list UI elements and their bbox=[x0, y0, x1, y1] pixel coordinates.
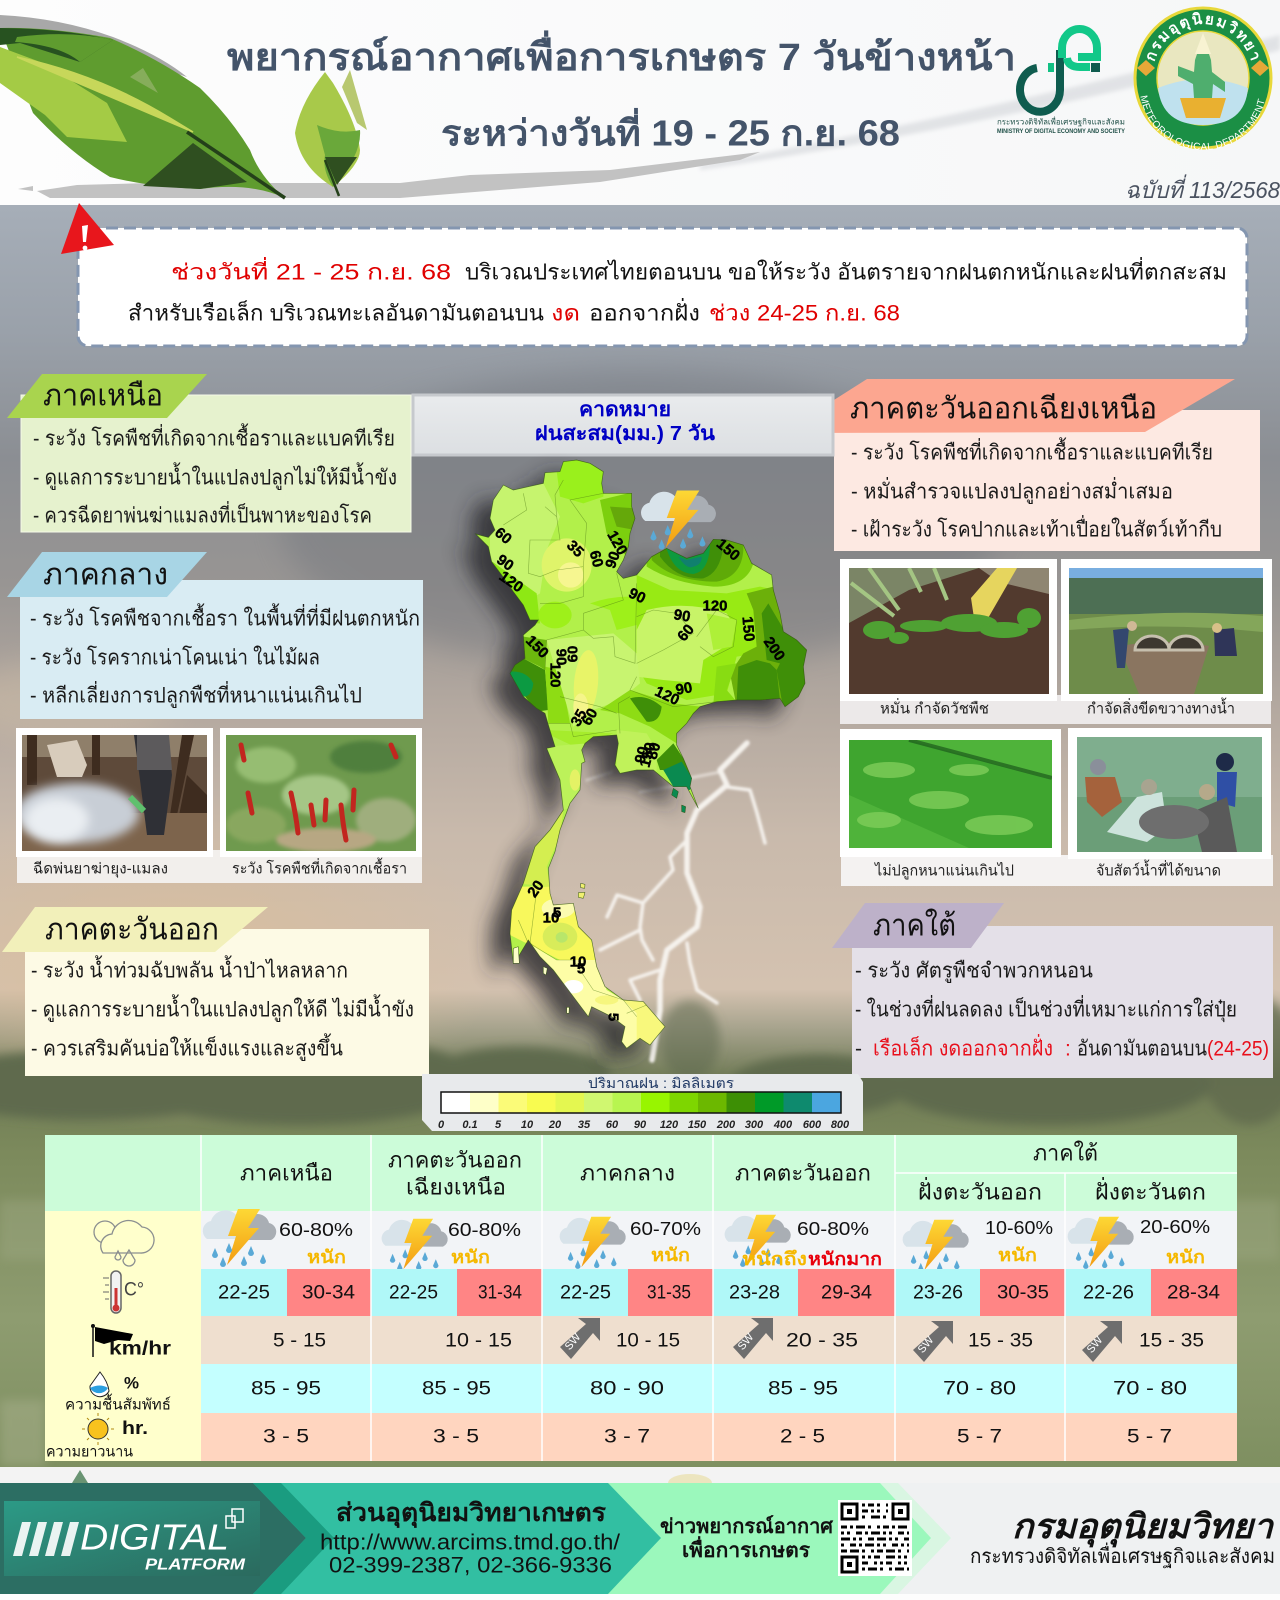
rain amount contour labels: 60 bbox=[491, 524, 515, 548]
forecast table bbox=[45, 1135, 1237, 1461]
rainfall map of Thailand bbox=[456, 450, 830, 1083]
icon: weather outline bbox=[94, 1221, 154, 1266]
rain amount contour labels: 60 bbox=[578, 706, 602, 728]
rainfall colour legend: 600 bbox=[803, 1119, 822, 1131]
rainfall colour legend: 300 bbox=[745, 1119, 764, 1131]
province lines bbox=[503, 480, 737, 1017]
rain amount contour labels: 90 bbox=[632, 745, 652, 765]
rain amount contour labels: 5 bbox=[604, 1013, 622, 1021]
photo grid: right four with captions: จับสัตว์น้ำที่ได้ขนาด bbox=[1096, 860, 1221, 880]
panel: eastern region: - ดูแลการระบายน้ำในแปลงปลูกให้ดี ไม่มีน้ำขัง bbox=[31, 994, 414, 1022]
icon: thermometer with celsius: C° bbox=[124, 1280, 144, 1300]
rain amount contour labels: 90 bbox=[672, 606, 692, 626]
panel: central region: - ระวัง โรครากเน่าโคนเน่า ในไม้ผล bbox=[30, 646, 320, 670]
department name: กรมอุตุนิยมวิทยา bbox=[1012, 1508, 1275, 1548]
title: พยากรณ์อากาศเพื่อการเกษตร 7 วันข้างหน้า bbox=[227, 30, 1016, 79]
photo grid: right four with captions: กำจัดสิ่งขีดขวางทางน้ำ bbox=[1087, 698, 1235, 718]
logo: meteorological department seal bbox=[1134, 6, 1272, 150]
rain amount contour labels: 80 bbox=[644, 741, 664, 761]
photo: clearing a culvert bbox=[1061, 559, 1272, 701]
rain amount contour labels: 5 bbox=[577, 960, 585, 978]
photo grid: right four with captions bbox=[840, 559, 1273, 886]
row: temperature: 28-34 bbox=[1167, 1282, 1220, 1304]
row: temperature: 29-34 bbox=[821, 1282, 872, 1304]
table header row: ภาคเหนือ bbox=[240, 1160, 333, 1186]
icon: wind sock with unit bbox=[91, 1324, 172, 1360]
panel: central region: ภาคกลาง bbox=[43, 558, 168, 592]
rainfall colour legend: 200 bbox=[716, 1119, 736, 1131]
subtitle date range: ระหว่างวันที่ 19 - 25 ก.ย. 68 bbox=[441, 108, 900, 154]
rainfall colour legend bbox=[422, 1074, 863, 1131]
row: rain chance: หนัก bbox=[307, 1247, 346, 1267]
rainfall colour legend: 20 bbox=[548, 1119, 562, 1131]
alert callout: งด bbox=[551, 300, 580, 326]
panel: eastern region: ภาคตะวันออก bbox=[45, 914, 219, 946]
icon: humidity drop with label bbox=[65, 1372, 171, 1414]
alert callout bbox=[61, 203, 1247, 346]
icon: wind sock with unit: km/hr bbox=[109, 1338, 172, 1360]
map heading bbox=[413, 395, 833, 455]
rainfall colour legend: ปริมาณฝน : มิลลิเมตร bbox=[588, 1075, 735, 1091]
lightning in the background bbox=[587, 743, 765, 1060]
row: rain chance: หนัก bbox=[998, 1245, 1037, 1265]
icon: sunshine with label: hr. bbox=[122, 1418, 148, 1438]
agromet contact block: http://www.arcims.tmd.go.th/ bbox=[320, 1530, 621, 1554]
rain amount contour labels: 90 bbox=[602, 549, 624, 571]
rain amount contour labels: 60 bbox=[586, 549, 606, 569]
table header row: ฝั่งตะวันออก bbox=[918, 1176, 1042, 1204]
row: wind speed and direction bbox=[201, 1316, 1237, 1364]
map outline bbox=[476, 460, 807, 1048]
logo: meteorological department seal: กรมอุตุนิยมวิทยา bbox=[1147, 12, 1258, 62]
row: temperature: 22-25 bbox=[218, 1282, 270, 1304]
row: temperature: 30-35 bbox=[997, 1282, 1049, 1304]
row: temperature: 31-34 bbox=[478, 1282, 522, 1304]
row: relative humidity: 85 - 95 bbox=[251, 1378, 321, 1400]
row: wind speed and direction: 10 - 15 bbox=[616, 1330, 680, 1352]
alert callout: สำหรับเรือเล็ก บริเวณทะเลอันดามันตอนบน bbox=[128, 298, 544, 326]
row: rain chance: หนักมาก bbox=[808, 1249, 882, 1269]
icon: sunshine with label: ความยาวนาน bbox=[46, 1444, 133, 1460]
qr caption: ข่าวพยากรณ์อากาศ bbox=[660, 1515, 834, 1538]
qr caption: เพื่อการเกษตร bbox=[682, 1535, 810, 1562]
panel: north region: - ดูแลการระบายน้ำในแปลงปลูกไม่ให้มีน้ำขัง bbox=[33, 462, 397, 490]
rain amount contour labels: 20 bbox=[524, 877, 548, 901]
icon: warning triangle bbox=[61, 203, 114, 254]
map heading: คาดหมาย bbox=[579, 399, 671, 421]
panel: southern region: - bbox=[855, 1038, 862, 1060]
rainfall colour legend: 60 bbox=[606, 1119, 619, 1131]
icon: storm cloud over map bbox=[641, 490, 716, 550]
panel: southern region: เรือเล็ก งดออกจากฝั่ง bbox=[873, 1034, 1053, 1060]
panel: southern region: - ในช่วงที่ฝนลดลง เป็นช่วงที่เหมาะแก่การใส่ปุ๋ย bbox=[855, 994, 1237, 1022]
rainfall colour legend: 150 bbox=[688, 1119, 707, 1131]
rain amount contour labels: 150 bbox=[522, 632, 552, 662]
panel: north region: - ระวัง โรคพืชที่เกิดจากเชื้อราและแบคทีเรีย bbox=[33, 424, 395, 450]
row: relative humidity: 80 - 90 bbox=[590, 1378, 664, 1400]
header band bbox=[0, 0, 1280, 205]
alert callout: ช่วงวันที่ 21 - 25 ก.ย. 68 bbox=[171, 256, 451, 284]
row: rain chance bbox=[201, 1209, 1237, 1272]
table header row: ภาคใต้ bbox=[1033, 1140, 1098, 1166]
table header row: ฝั่งตะวันตก bbox=[1095, 1176, 1206, 1204]
row: temperature: 22-25 bbox=[389, 1282, 438, 1304]
rain amount contour labels: 120 bbox=[546, 662, 564, 688]
table header row: ภาคตะวันออก bbox=[735, 1160, 871, 1186]
icon: humidity drop with label: % bbox=[124, 1374, 139, 1392]
rain amount contour labels: 10 bbox=[570, 954, 586, 970]
photo: harvesting fish from a pond bbox=[1068, 728, 1271, 859]
qr code bbox=[838, 1500, 912, 1576]
row: sunshine hours: 3 - 7 bbox=[604, 1426, 650, 1448]
table header row: เฉียงเหนือ bbox=[406, 1174, 506, 1200]
table header row: ภาคกลาง bbox=[580, 1160, 675, 1186]
row: temperature: 31-35 bbox=[647, 1282, 691, 1304]
panel: central region bbox=[7, 552, 423, 719]
panel: north region: - ควรฉีดยาพ่นฆ่าแมลงที่เป็นพาหะของโรค bbox=[33, 500, 372, 528]
photo grid: right four with captions: หมั่น กำจัดวัชพืช bbox=[880, 698, 989, 718]
rainfall colour legend: 0.1 bbox=[462, 1119, 478, 1131]
rainfall colour legend: 0 bbox=[438, 1119, 445, 1131]
row: rain chance: 60-80% bbox=[279, 1220, 353, 1240]
row: rain chance: 60-70% bbox=[630, 1219, 701, 1239]
swoosh shadow bbox=[18, 152, 760, 198]
logo: meteorological department seal: METEOROLOGICAL DEPARTMENT bbox=[1140, 96, 1264, 150]
alert callout: บริเวณประเทศไทยตอนบน ขอให้ระวัง อันตรายจากฝนตกหนักและฝนที่ตกสะสม bbox=[465, 256, 1227, 284]
rain amount contour labels: 10 bbox=[543, 910, 559, 926]
rainfall colour legend: 400 bbox=[773, 1119, 793, 1131]
row: temperature: 30-34 bbox=[302, 1282, 355, 1304]
rainfall colour legend: 120 bbox=[660, 1119, 679, 1131]
rain amount contour labels: 200 bbox=[760, 634, 788, 664]
row: sunshine hours bbox=[201, 1413, 1237, 1461]
panel: north-eastern region: - ระวัง โรคพืชที่เกิดจากเชื้อราและแบคทีเรีย bbox=[851, 438, 1213, 464]
rainfall colour legend: 90 bbox=[634, 1119, 647, 1131]
logo: ministry of digital economy: MINISTRY OF DIGITAL ECONOMY AND SOCIETY bbox=[997, 129, 1125, 135]
rain amount contour labels: 90 bbox=[626, 585, 648, 607]
rain amount contour labels: 90 bbox=[674, 679, 694, 699]
panel: north region: ภาคเหนือ bbox=[43, 380, 163, 412]
panel: southern region: อันดามันตอนบน bbox=[1077, 1038, 1207, 1060]
panel: north-eastern region: - เฝ้าระวัง โรคปากและเท้าเปื่อยในสัตว์เท้ากีบ bbox=[851, 514, 1222, 542]
qr caption bbox=[660, 1515, 834, 1562]
photo strip: left pair with captions: ฉีดพ่นยาฆ่ายุง-แมลง bbox=[33, 860, 168, 878]
agromet contact block bbox=[320, 1499, 621, 1578]
row: relative humidity: 85 - 95 bbox=[768, 1378, 838, 1400]
photo strip: left pair with captions bbox=[15, 728, 422, 883]
row: wind speed and direction: 5 - 15 bbox=[273, 1330, 326, 1352]
rain amount contour labels: 120 bbox=[603, 528, 631, 558]
rain amount contour labels: 60 bbox=[564, 646, 582, 662]
panel: central region: - ระวัง โรคพืชจากเชื้อรา ในพื้นที่ที่มีฝนตกหนัก bbox=[30, 604, 420, 630]
logo: ministry of digital economy bbox=[997, 29, 1125, 135]
row label column bbox=[45, 1211, 201, 1461]
photo: chilli plants bbox=[220, 728, 422, 857]
row: rain chance: หนัก bbox=[1166, 1247, 1205, 1267]
agromet contact block: ส่วนอุตุนิยมวิทยาเกษตร bbox=[336, 1499, 607, 1529]
panel: southern region: (24-25) bbox=[1207, 1038, 1269, 1060]
icon: big leaf bbox=[0, 15, 285, 198]
row: sunshine hours: 5 - 7 bbox=[957, 1426, 1002, 1448]
panel: southern region: ภาคใต้ bbox=[873, 908, 956, 942]
panel: north-eastern region: - หมั่นสำรวจแปลงปลูกอย่างสม่ำเสมอ bbox=[851, 476, 1173, 504]
photo: dense seedlings bbox=[840, 729, 1061, 857]
row: temperature: 22-25 bbox=[560, 1282, 611, 1304]
row: relative humidity: 85 - 95 bbox=[422, 1378, 491, 1400]
rainfall colour legend: 35 bbox=[578, 1119, 591, 1131]
row: temperature: 23-28 bbox=[729, 1282, 780, 1304]
icon: humidity drop with label: ความชื้นสัมพัทธ์ bbox=[65, 1394, 171, 1414]
rain amount contour labels: 60 bbox=[674, 621, 698, 645]
panel: eastern region bbox=[2, 907, 429, 1076]
icon: sunshine with label bbox=[46, 1413, 148, 1460]
rain amount contour labels: 120 bbox=[702, 598, 728, 614]
logo: ministry of digital economy: กระทรวงดิจิทัลเพื่อเศรษฐกิจและสังคม bbox=[997, 116, 1125, 126]
alert callout: ออกจากฝั่ง bbox=[589, 298, 700, 326]
row: relative humidity: 70 - 80 bbox=[943, 1378, 1016, 1400]
rain amount contour labels: 150 bbox=[713, 535, 743, 565]
photo strip: left pair with captions: ระวัง โรคพืชที่เกิดจากเชื้อรา bbox=[232, 858, 407, 878]
table header row bbox=[45, 1135, 1237, 1461]
row: wind speed and direction: 15 - 35 bbox=[1139, 1330, 1204, 1352]
rainfall colour legend: 800 bbox=[831, 1119, 850, 1131]
rainfall colour legend: 10 bbox=[521, 1119, 534, 1131]
department name bbox=[970, 1508, 1275, 1568]
table header row: ภาคตะวันออก bbox=[388, 1148, 522, 1172]
row: wind speed and direction: 20 - 35 bbox=[786, 1330, 858, 1352]
row: rain chance: หนัก bbox=[451, 1247, 490, 1267]
icon: small leaf bbox=[295, 70, 367, 196]
panel: eastern region: - ระวัง น้ำท่วมฉับพลัน น้ำป่าไหลหลาก bbox=[31, 956, 348, 982]
photo: hand weeding bbox=[840, 559, 1057, 701]
photo: fogging insects in a cattle pen bbox=[15, 728, 213, 857]
footer chevrons bbox=[0, 1483, 1280, 1594]
rain amount contour labels: 35 bbox=[563, 537, 587, 561]
rain amount contour labels: 5 bbox=[553, 904, 561, 922]
digital platform badge: PLATFORM bbox=[145, 1556, 246, 1574]
map heading: ฝนสะสม(มม.) 7 วัน bbox=[535, 423, 715, 445]
row: relative humidity bbox=[201, 1364, 1237, 1413]
rain amount contour labels: 150 bbox=[738, 616, 758, 642]
row: temperature bbox=[201, 1269, 1237, 1316]
rain amount contour labels: 120 bbox=[652, 683, 682, 709]
rain amount contour labels: 150 bbox=[637, 741, 659, 769]
row: temperature: 22-26 bbox=[1083, 1282, 1134, 1304]
row: rain chance: หนักถึง bbox=[742, 1249, 807, 1269]
rain amount contour labels: 90 bbox=[493, 551, 517, 575]
panel: central region: - หลีกเลี่ยงการปลูกพืชที่หนาแน่นเกินไป bbox=[30, 680, 362, 708]
row: rain chance: 10-60% bbox=[985, 1218, 1053, 1238]
panel: eastern region: - ควรเสริมคันบ่อให้แข็งแรงและสูงขึ้น bbox=[31, 1034, 343, 1062]
row: rain chance: 20-60% bbox=[1140, 1217, 1210, 1237]
row: sunshine hours: 3 - 5 bbox=[433, 1426, 479, 1448]
row: wind speed and direction: 15 - 35 bbox=[968, 1330, 1033, 1352]
rain amount contour labels: 120 bbox=[496, 568, 526, 596]
row: sunshine hours: 5 - 7 bbox=[1127, 1426, 1172, 1448]
row: rain chance: หนัก bbox=[651, 1245, 690, 1265]
icon: thermometer with celsius bbox=[103, 1271, 144, 1313]
panel: north-eastern region: ภาคตะวันออกเฉียงเหนือ bbox=[850, 392, 1157, 426]
footer banner bbox=[0, 1467, 1280, 1600]
digital platform badge: DIGITAL bbox=[80, 1516, 229, 1558]
row: rain chance: 60-80% bbox=[797, 1219, 869, 1239]
panel: southern region bbox=[832, 903, 1273, 1078]
photo grid: right four with captions: ไม่ปลูกหนาแน่นเกินไป bbox=[874, 862, 1014, 880]
row: rain chance: 60-80% bbox=[448, 1220, 521, 1240]
panel: north-eastern region bbox=[782, 379, 1260, 551]
panel: north region bbox=[7, 374, 411, 532]
panel: southern region: : bbox=[1065, 1038, 1071, 1060]
panel: southern region: - ระวัง ศัตรูพืชจำพวกหนอน bbox=[855, 960, 1093, 984]
row: sunshine hours: 2 - 5 bbox=[780, 1426, 825, 1448]
row: relative humidity: 70 - 80 bbox=[1113, 1378, 1187, 1400]
agromet contact block: 02-399-2387, 02-366-9336 bbox=[329, 1552, 612, 1578]
row: temperature: 23-26 bbox=[913, 1282, 963, 1304]
digital platform badge bbox=[4, 1501, 260, 1576]
rainfall colour legend: 5 bbox=[495, 1119, 502, 1131]
rain amount contour labels: 90 bbox=[552, 649, 570, 665]
rain amount contour labels: 35 bbox=[567, 707, 591, 729]
islands bbox=[513, 788, 686, 1013]
alert callout: ช่วง 24-25 ก.ย. 68 bbox=[709, 300, 900, 326]
row: wind speed and direction: 10 - 15 bbox=[445, 1330, 512, 1352]
row: sunshine hours: 3 - 5 bbox=[263, 1426, 309, 1448]
rain amount contour labels bbox=[491, 524, 788, 1021]
